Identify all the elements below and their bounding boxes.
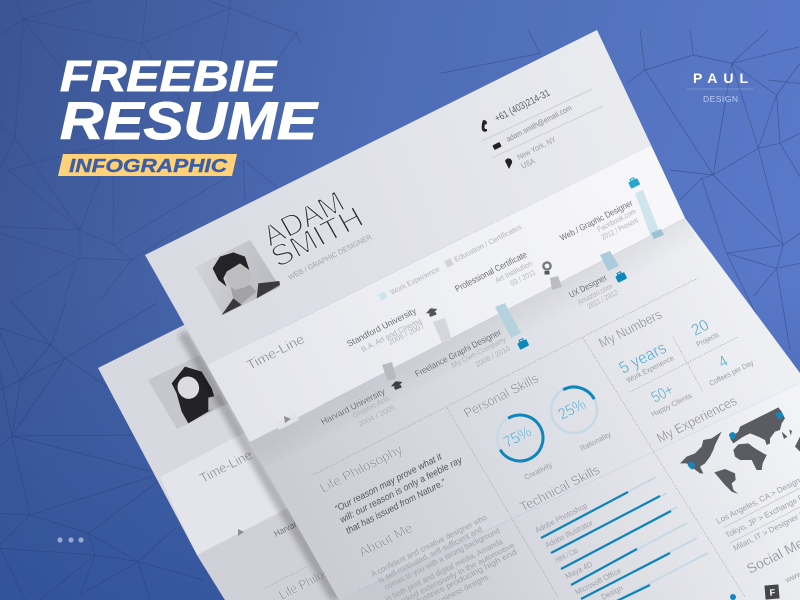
logo: Paul Design: PAUL (693, 70, 748, 86)
back sheet portrait (148, 355, 236, 429)
quote: will: our reason is only a feeble ray (338, 454, 465, 526)
middle panel (250, 218, 800, 600)
my numbers: 50+ (648, 381, 677, 406)
skill labels (534, 501, 625, 600)
skill labels: Adobe Photoshop (534, 501, 589, 535)
timeline entry: UX Designer: 2011 / 2012 (586, 288, 620, 311)
timeline entry: Harvard: Graphic Arts (351, 394, 391, 420)
timeline entry: UX Designer: UX Designer (567, 273, 609, 300)
timeline entry: Freelance: My Own Company (450, 335, 508, 370)
my numbers: 4 (715, 352, 731, 371)
timeline entry: Professional Certificate: 03 / 2011 (509, 268, 537, 288)
title: FREEBIE (60, 52, 278, 101)
section dividers (313, 278, 745, 597)
timeline entry: Freelance: Freelance Graphi Designer (413, 327, 503, 379)
back resume sheet (98, 297, 360, 600)
world map (680, 407, 800, 494)
portrait: Adam Smith (195, 240, 280, 315)
job subtitle: WEB / GRAPHIC DESIGNER (287, 232, 374, 282)
my numbers (596, 307, 755, 419)
name heading: SMITH (265, 201, 369, 274)
my numbers: 20 (688, 316, 712, 339)
timeline entry: Professional Certificate: Art Institution (494, 259, 534, 285)
ring: rationality 25%: 25% (555, 395, 589, 423)
about me: About Me (356, 520, 415, 560)
contact block: adam.smith@email.com (505, 103, 574, 144)
contact block: +61 (403)214-31 (493, 88, 552, 125)
background mesh top left (0, 0, 300, 300)
about text: is self-motivated, self-sufficient and (377, 525, 484, 585)
my experiences (654, 393, 800, 553)
timeline entry: Professional Certificate: Professional Certificate (453, 249, 529, 294)
my numbers: 5 years (616, 338, 670, 377)
life philosophy (317, 442, 465, 537)
name heading (257, 185, 374, 282)
my numbers: Projects (695, 330, 721, 349)
back sheet white band (160, 393, 340, 555)
background mesh right (440, 30, 800, 350)
back sheet text (197, 447, 332, 600)
timeline entry: Web / Graphic Designer: 2012 / Present (600, 215, 640, 242)
infographic banner: INFOGRAPHIC (69, 156, 228, 176)
skill labels: Maya 4D (564, 560, 594, 581)
icon: graduation cap (425, 306, 439, 318)
experience list (715, 466, 800, 553)
technical skills (517, 462, 708, 600)
icon: briefcase (516, 337, 529, 350)
technical skills: Technical Skills (517, 462, 603, 515)
about me (356, 513, 518, 600)
ring: rationality 25% (543, 379, 613, 453)
social media (730, 526, 800, 600)
timeline entry: Web / Graphic Designer: Web / Graphic Designer (558, 198, 635, 243)
timeline entry: Standford: Standford University (345, 305, 418, 349)
background mesh bottom left (0, 300, 203, 600)
icon: certificate ribbon (543, 262, 551, 274)
back sheet text: Harvar (272, 519, 298, 539)
white timeline band (207, 145, 685, 442)
personal skills (461, 371, 613, 482)
logo: Paul Design: DESIGN (703, 94, 738, 104)
timeline legend: Work Experience (389, 264, 441, 297)
name heading: ADAM (257, 185, 350, 253)
contact block (482, 88, 603, 171)
icon: facebook: F (769, 587, 776, 598)
icon: envelope (492, 142, 502, 150)
logo: Paul Design (687, 70, 753, 104)
personal skills: Personal Skills (461, 371, 541, 421)
skill labels: Html / Css (554, 546, 579, 565)
quote: “Our reason may prove what it (333, 452, 444, 515)
quote: that has issued from Nature.” (344, 477, 449, 537)
timeline legend: Education / Certificates (453, 222, 523, 264)
timeline bars (275, 190, 664, 430)
title: RESUME (60, 92, 319, 151)
infographic banner (58, 154, 237, 176)
timeline entry: UX Designer (567, 270, 627, 311)
my experiences: My Experiences (654, 393, 740, 446)
back sheet text: Time-Line (197, 447, 255, 486)
contact block: New York, NY (516, 135, 558, 162)
title (60, 52, 319, 151)
about text: comes to you with a strong background (383, 526, 502, 592)
my numbers: My Numbers (596, 307, 665, 351)
timeline entry: Web / Graphic Designer: Facebook.com (596, 207, 638, 234)
pagination dots (57, 537, 84, 543)
my numbers: Coffees per Day (708, 358, 755, 388)
skill bar tracks (541, 477, 708, 600)
timeline entry: Harvard: 2004 / 2005 (357, 403, 397, 429)
back sheet paper (98, 297, 360, 600)
map pins (688, 412, 783, 470)
timeline entry: Harvard: Harvard University (319, 386, 387, 427)
timeline legend (378, 222, 523, 301)
ring: creativity 75% (488, 406, 554, 482)
timeline entry: Standford: 2005 / 2007 (387, 321, 426, 347)
ring: rationality 25%: Rationality (579, 430, 613, 453)
icon: graduation cap (390, 379, 404, 391)
icon: briefcase (627, 176, 640, 189)
timeline heading: Time-Line (244, 332, 307, 373)
front sheet shadow (178, 330, 345, 600)
front resume sheet (145, 30, 800, 600)
timeline entry: Freelance: 2008 / 2010 (474, 344, 512, 369)
icon: briefcase (614, 270, 627, 283)
my numbers: Work Experience (625, 353, 676, 385)
icon: location pin (505, 158, 512, 169)
about text: A confident and creative designer who (370, 513, 489, 579)
back sheet lower panel (197, 488, 360, 600)
top panel (145, 30, 651, 365)
skill labels: Microsoft Office (574, 566, 623, 597)
ring: creativity 75%: 75% (500, 423, 535, 451)
lower panel (339, 383, 800, 600)
skill bar fills (541, 492, 671, 600)
icon: phone (482, 120, 487, 132)
contact block: USA (520, 156, 537, 171)
ring: creativity 75%: Creativity (523, 460, 554, 482)
timeline entry: UX Designer: Amazon.com (576, 282, 614, 307)
my numbers: Happy Clients (650, 391, 694, 419)
skill labels: Adobe Illustrator (544, 518, 595, 550)
timeline entry: Standford: B.A. Art and Cinema (360, 316, 424, 354)
life philosophy: Life Philosophy (317, 442, 405, 496)
